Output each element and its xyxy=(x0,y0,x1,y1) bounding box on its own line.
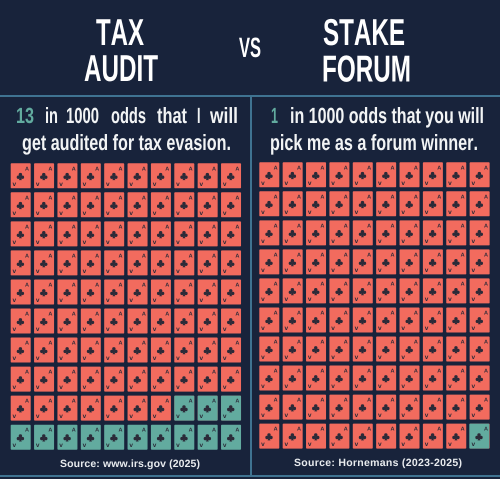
right card grid: 1 in 1000 xyxy=(259,162,500,449)
title: tax audit: AUDIT xyxy=(84,47,158,89)
left row 4: AAAAAAAAAA xyxy=(25,253,259,259)
left statement text: odds xyxy=(111,103,146,128)
left row 5 xyxy=(11,280,259,304)
left row 3 xyxy=(11,221,259,246)
left row 7: vvvvvvvvvv xyxy=(12,355,246,362)
right row 2 xyxy=(259,191,500,216)
left row 3: vvvvvvvvvv xyxy=(12,239,246,246)
right row 6: vvvvvvvvvv xyxy=(261,325,495,332)
right statement text xyxy=(270,103,484,155)
left row 8: AAAAAAAAAA xyxy=(25,370,259,376)
left row 5: AAAAAAAAAA xyxy=(25,282,259,288)
left row 9 with three teal cards: AAAAAAAAAA xyxy=(25,399,259,405)
left row 9 with three teal cards: vvvvvvvvvv xyxy=(12,413,246,420)
left row 7 xyxy=(11,338,259,362)
right row 7: vvvvvvvvvv xyxy=(261,354,495,361)
title: tax audit: TAX xyxy=(96,11,144,53)
left card grid: 13 in 1000 xyxy=(11,163,259,450)
left statement text: 1000 xyxy=(66,103,99,128)
left row 10 all teal: AAAAAAAAAA xyxy=(25,428,259,434)
left row 9 with three teal cards xyxy=(11,396,259,421)
right source note: Source: Hornemans (2023-2025) xyxy=(294,457,462,469)
title: tax audit xyxy=(84,11,158,89)
title: stake forum: FORUM xyxy=(322,48,411,90)
right row 3: vvvvvvvvvv xyxy=(261,238,495,245)
left row 6: AAAAAAAAAA xyxy=(25,312,259,318)
left row 8: vvvvvvvvvv xyxy=(12,384,246,391)
left row 8 xyxy=(11,367,259,392)
right row 10 with one teal card xyxy=(259,424,500,449)
left row 7: AAAAAAAAAA xyxy=(25,340,259,346)
left row 6 xyxy=(11,308,259,334)
panel: stake forum odds xyxy=(259,103,500,469)
right row 9: vvvvvvvvvv xyxy=(261,412,495,419)
right row 9 xyxy=(259,395,500,420)
left row 1: vvvvvvvvvv xyxy=(12,181,246,188)
left statement text: I xyxy=(197,103,200,128)
right row 4 xyxy=(259,249,500,274)
title: stake forum xyxy=(322,11,411,90)
panel: tax audit odds xyxy=(11,103,259,470)
right row 5 xyxy=(259,278,500,303)
left statement text: get audited for tax evasion. xyxy=(22,130,231,155)
right statement text: 1 xyxy=(271,103,278,128)
right row 7 xyxy=(259,336,500,362)
left row 5: vvvvvvvvvv xyxy=(12,297,246,304)
right row 1: vvvvvvvvvv xyxy=(261,180,495,187)
left row 4: vvvvvvvvvv xyxy=(12,268,246,275)
left source note: Source: www.irs.gov (2025) xyxy=(60,458,200,470)
left row 6: vvvvvvvvvv xyxy=(12,326,246,333)
left statement text: will xyxy=(209,103,238,128)
right row 6 xyxy=(259,308,500,332)
left row 1 xyxy=(11,163,259,188)
left statement text: in xyxy=(45,103,58,128)
right row 8: vvvvvvvvvv xyxy=(261,383,495,390)
left row 10 all teal xyxy=(11,425,259,450)
left row 4 xyxy=(11,250,259,275)
left statement text xyxy=(16,103,238,155)
left row 2 xyxy=(11,192,259,217)
left row 2: vvvvvvvvvv xyxy=(12,210,246,217)
left row 1: AAAAAAAAAA xyxy=(25,166,259,172)
right row 3 xyxy=(259,220,500,245)
left row 2: AAAAAAAAAA xyxy=(25,195,259,201)
right row 2: vvvvvvvvvv xyxy=(261,209,495,216)
left row 3: AAAAAAAAAA xyxy=(25,224,259,230)
left row 10 all teal: vvvvvvvvvv xyxy=(12,442,246,449)
right row 10 with one teal card: vvvvvvvvvv xyxy=(261,441,495,448)
versus label: VS xyxy=(239,32,261,63)
right row 8 xyxy=(259,366,500,390)
left statement text: that xyxy=(157,103,187,128)
left statement text: 13 xyxy=(16,103,34,128)
right row 4: vvvvvvvvvv xyxy=(261,267,495,274)
right row 1 xyxy=(259,162,500,187)
right row 5: vvvvvvvvvv xyxy=(261,296,495,303)
title: stake forum: STAKE xyxy=(323,11,405,53)
